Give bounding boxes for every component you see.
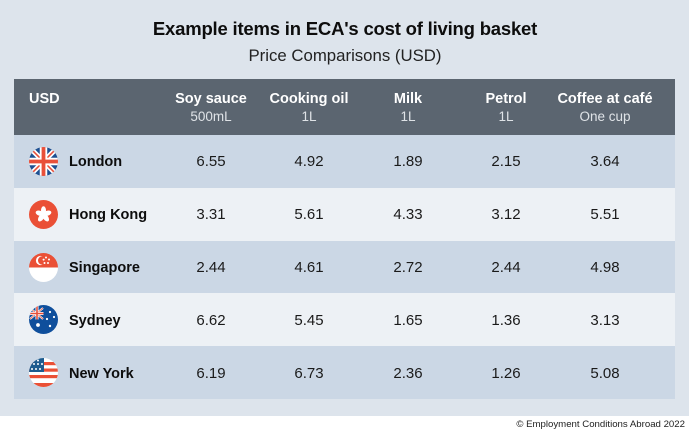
value: 6.73: [294, 365, 324, 382]
header: petrol: [485, 91, 527, 124]
icon: UK flag: [29, 147, 58, 176]
value: 3.12: [491, 206, 521, 223]
header: cooking oil: 1L: [301, 109, 317, 124]
value: 2.36: [393, 365, 423, 382]
icon: Australia flag: [29, 305, 58, 334]
header: petrol: Petrol: [485, 91, 527, 107]
header: milk: 1L: [400, 109, 416, 124]
value: 4.61: [294, 259, 324, 276]
value: 4.33: [393, 206, 423, 223]
city: London: London: [69, 154, 122, 170]
icon: Hong Kong flag: [29, 200, 58, 229]
header: coffee at cafe: Coffee at café: [557, 91, 653, 107]
row: London: [14, 135, 675, 188]
header: coffee at cafe: [557, 91, 653, 124]
value: 5.61: [294, 206, 324, 223]
value: 4.92: [294, 153, 324, 170]
header: cooking oil: Cooking oil: [270, 91, 348, 107]
icon: US flag: [29, 358, 58, 387]
header: USD: USD: [29, 91, 60, 107]
table: [14, 79, 675, 399]
header: milk: Milk: [394, 91, 422, 107]
row: Sydney: [14, 293, 675, 346]
header: petrol: 1L: [498, 109, 514, 124]
header: coffee at cafe: One cup: [579, 109, 631, 124]
header: soy sauce: [175, 91, 247, 124]
value: 1.65: [393, 312, 423, 329]
header: cooking oil: [270, 91, 348, 124]
value: 4.98: [590, 259, 620, 276]
copyright note: © Employment Conditions Abroad 2022: [516, 419, 685, 430]
table header: [14, 79, 675, 135]
icon: Singapore flag: [29, 253, 58, 282]
value: 3.13: [590, 312, 620, 329]
value: 2.44: [196, 259, 226, 276]
header: milk: [394, 91, 422, 124]
value: 2.15: [491, 153, 521, 170]
row: Singapore: [14, 241, 675, 294]
value: 2.72: [393, 259, 423, 276]
value: 5.45: [294, 312, 324, 329]
row: New York: [14, 346, 675, 399]
city: Sydney: Sydney: [69, 313, 121, 329]
value: 3.31: [196, 206, 226, 223]
value: 6.62: [196, 312, 226, 329]
value: 6.19: [196, 365, 226, 382]
value: 2.44: [491, 259, 521, 276]
title: Example items in ECA's cost of living basket: [153, 18, 537, 39]
city: Hong Kong: Hong Kong: [69, 207, 147, 223]
subtitle: Price Comparisons (USD): [248, 46, 442, 65]
city: New York: New York: [69, 366, 134, 382]
value: 3.64: [590, 153, 620, 170]
value: 5.08: [590, 365, 620, 382]
header: soy sauce: Soy sauce: [175, 91, 247, 107]
value: 6.55: [196, 153, 226, 170]
value: 1.89: [393, 153, 423, 170]
value: 1.36: [491, 312, 521, 329]
row: Hong Kong: [14, 188, 675, 241]
value: 1.26: [491, 365, 521, 382]
city: Singapore: Singapore: [69, 260, 140, 276]
value: 5.51: [590, 206, 620, 223]
header: soy sauce: 500mL: [190, 109, 232, 124]
